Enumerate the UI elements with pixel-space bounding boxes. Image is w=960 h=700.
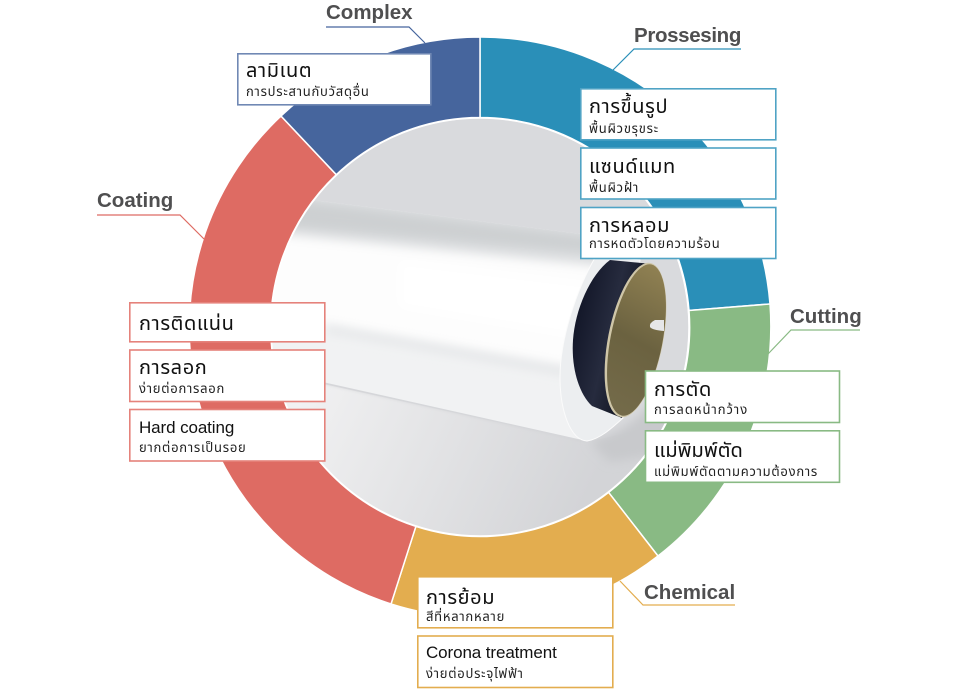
callout: Cutting <box>646 305 862 482</box>
box: annealing: การหดตัวโดยความร้อน <box>589 236 720 251</box>
box: sandmat: พื้นผิวฝ้า <box>589 178 639 195</box>
box: lamination <box>238 54 431 105</box>
callout: Chemical <box>418 577 735 688</box>
heading: Coating: Coating <box>97 189 173 212</box>
box: slitting: การตัด <box>654 379 712 401</box>
box: peeling: การลอก <box>139 357 207 379</box>
box: hard coating: Hard coating <box>139 418 234 437</box>
heading: Prossesing: Prossesing <box>634 24 741 47</box>
black core <box>573 260 652 418</box>
callout: Coating <box>97 189 325 461</box>
box: lamination: การประสานกับวัสดุอื่น <box>246 82 370 99</box>
box: corona treatment <box>418 636 613 688</box>
box: annealing: การหลอม <box>589 215 670 237</box>
segment: Coating <box>189 116 416 604</box>
box: slitting: การลดหน้ากว้าง <box>654 402 748 417</box>
roll flange <box>560 256 640 441</box>
box: sandmat: แซนด์แมท <box>589 156 676 178</box>
box: dyeing: สีที่หลากหลาย <box>426 607 505 624</box>
box: hard coating: ยากต่อการเป็นรอย <box>139 440 247 455</box>
box: corona treatment: Corona treatment <box>426 643 557 662</box>
box: lamination: ลามิเนต <box>246 60 312 82</box>
heading: Complex: Complex <box>326 1 413 24</box>
box: adhesion <box>130 303 325 342</box>
box: peeling: ง่ายต่อการลอก <box>139 381 225 396</box>
box: adhesion: การติดแน่น <box>139 312 234 335</box>
box: die cutting: แม่พิมพ์ตัด <box>654 439 743 462</box>
segment: Prossesing <box>480 37 770 310</box>
box: dyeing: การย้อม <box>426 586 495 609</box>
segment: Cutting <box>609 304 771 556</box>
photo: film roll <box>260 110 700 540</box>
box: embossing <box>581 89 776 140</box>
callout: Complex <box>238 1 431 105</box>
box: die cutting <box>646 431 840 482</box>
box: corona treatment: ง่ายต่อประจุไฟฟ้า <box>426 666 524 681</box>
donut process diagram <box>97 4 860 688</box>
heading: Chemical: Chemical <box>644 581 735 604</box>
box: die cutting: แม่พิมพ์ตัดตามความต้องการ <box>654 464 818 479</box>
box: hard coating <box>130 410 325 461</box>
box: dyeing <box>418 577 613 628</box>
box: slitting <box>646 371 840 422</box>
heading: Cutting: Cutting <box>790 305 862 328</box>
box: embossing: การขึ้นรูป <box>589 92 668 119</box>
callout: Prossesing <box>581 24 776 258</box>
segment: Complex <box>281 37 480 175</box>
segment: Chemical <box>391 492 658 618</box>
box: annealing <box>581 208 776 258</box>
box: peeling <box>130 350 325 402</box>
box: sandmat <box>581 148 776 199</box>
box: embossing: พื้นผิวขรุขระ <box>589 119 659 136</box>
tan core face <box>604 262 666 418</box>
